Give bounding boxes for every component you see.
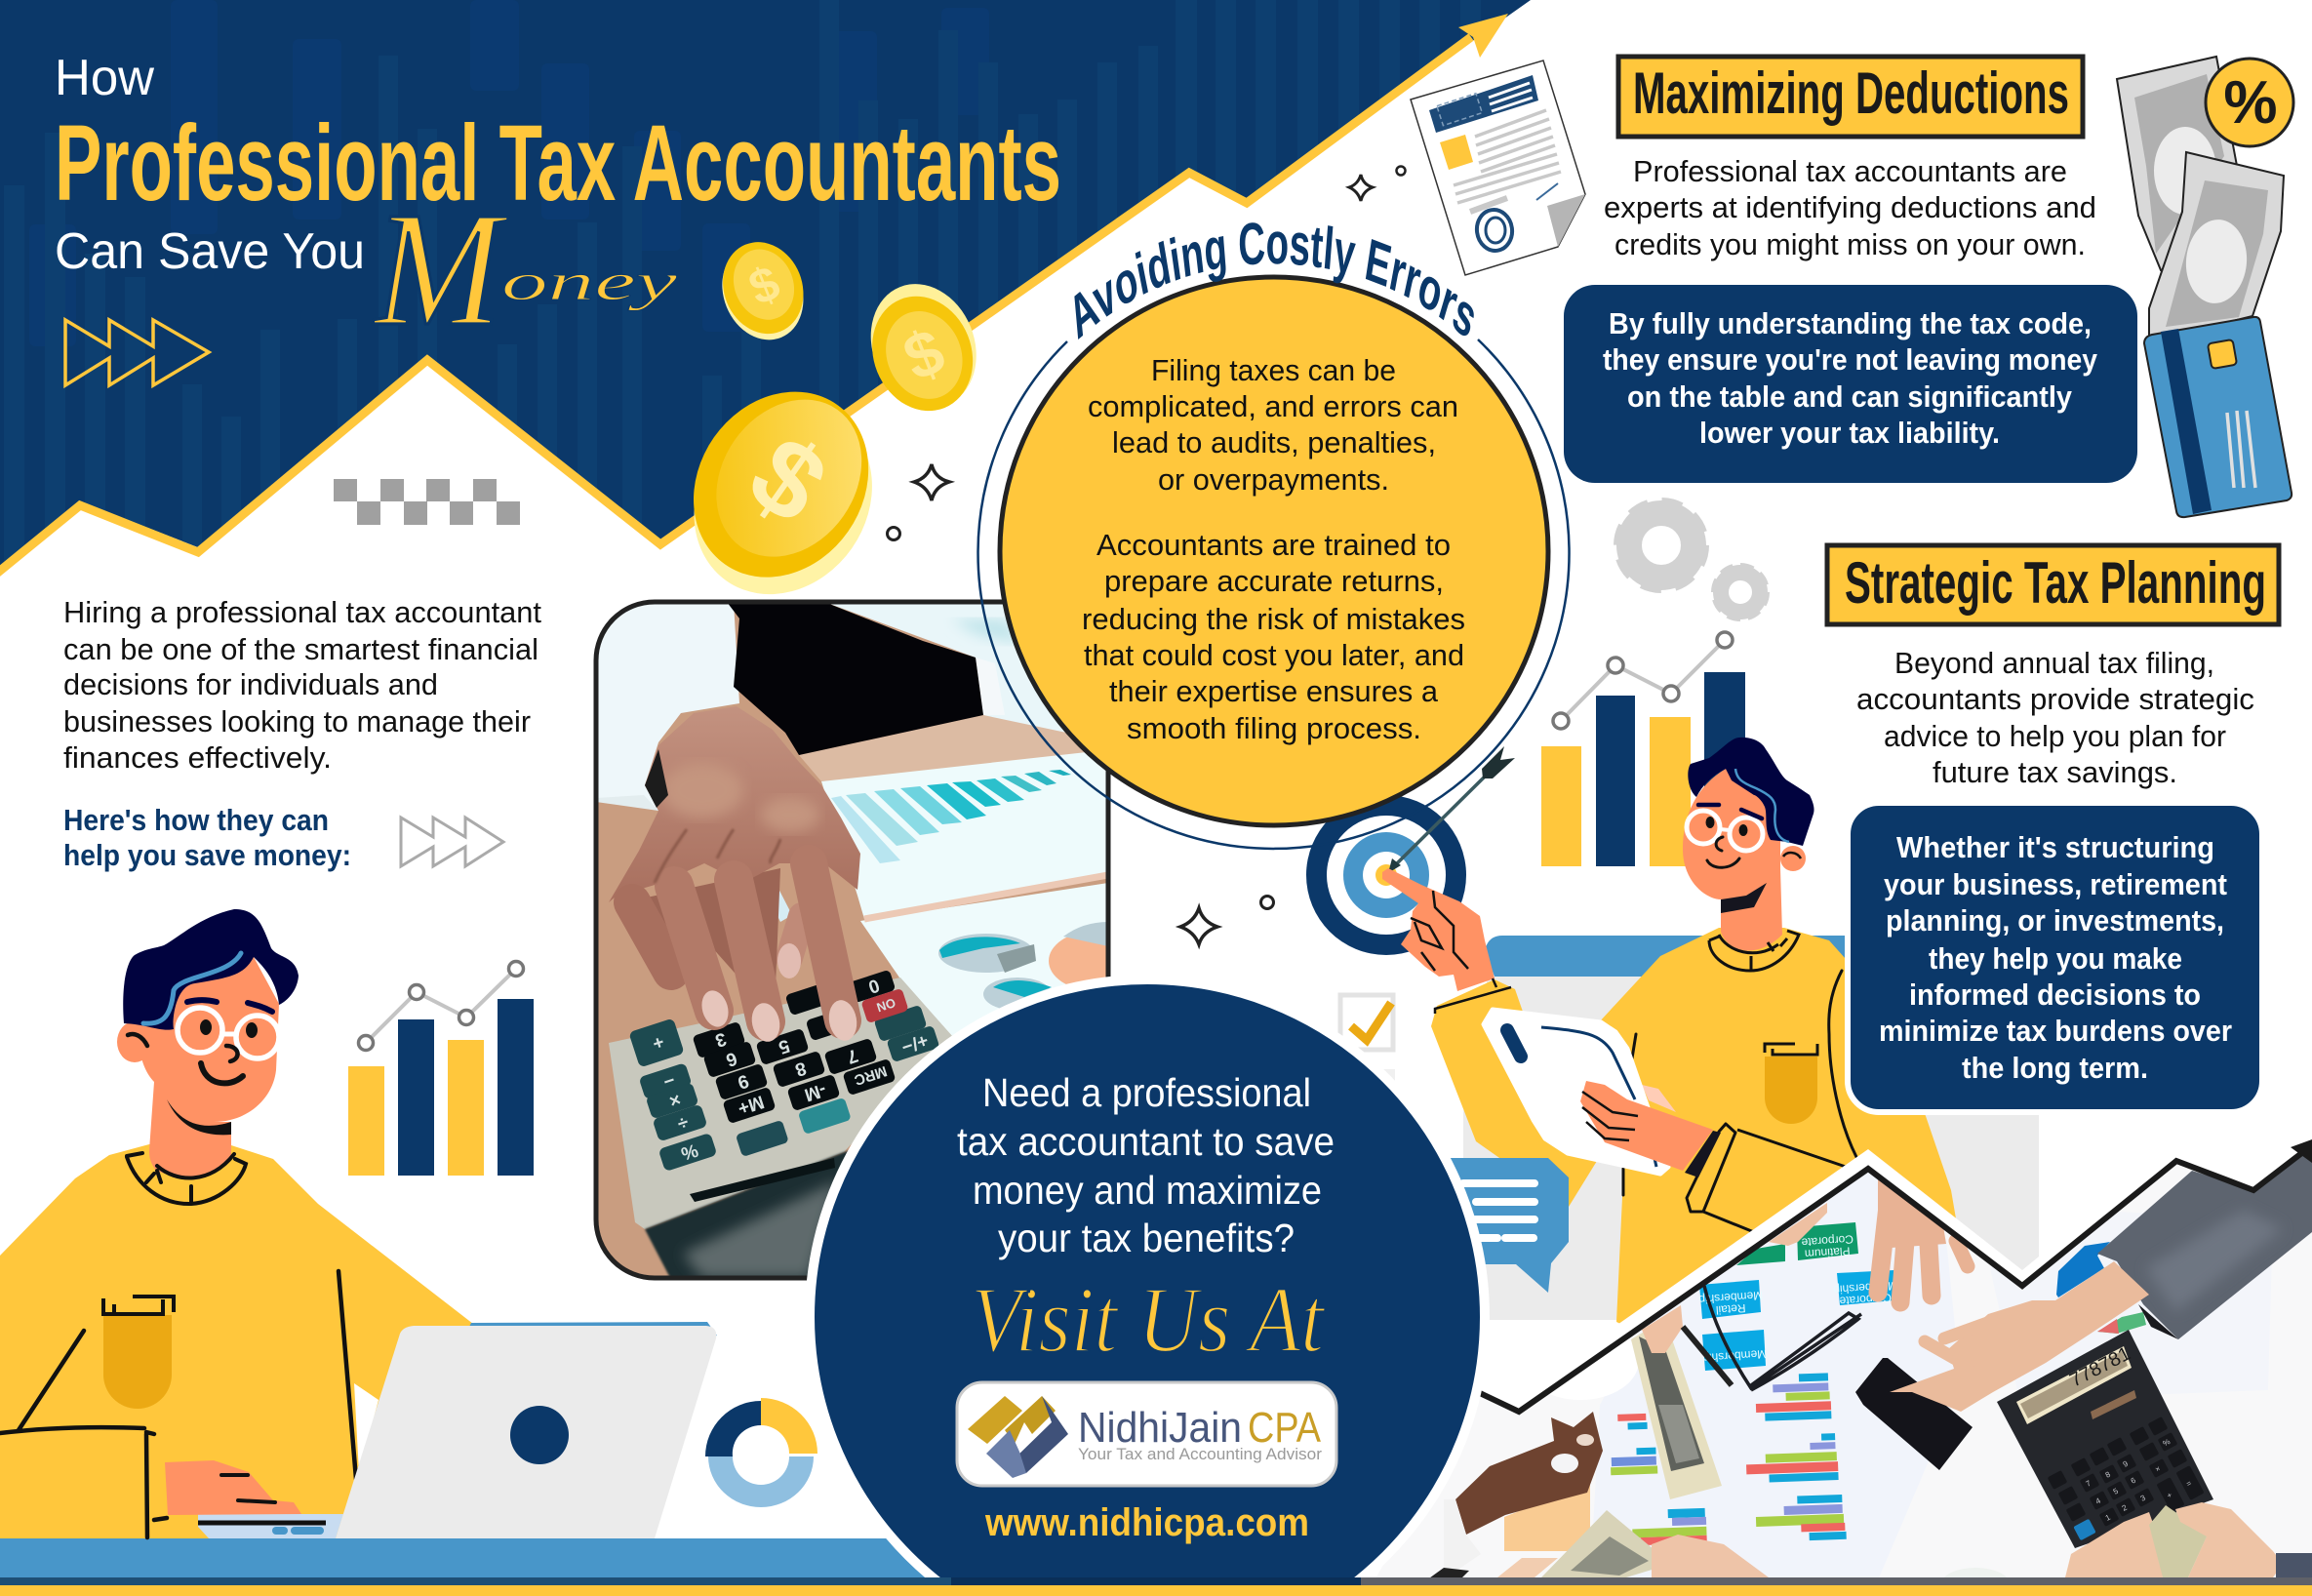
illustration: man at laptop xyxy=(0,909,717,1538)
title: Can Save You: Can Save You xyxy=(55,223,365,280)
text block: intro: Hiring a professional tax accountant xyxy=(63,595,541,629)
photo: team reviewing charts and money: Corporate xyxy=(1801,1232,1854,1250)
photo: team reviewing charts and money: 1 xyxy=(2104,1513,2112,1523)
panel: strategic callout: Whether it's structuring xyxy=(1896,830,2214,864)
paper sheets xyxy=(1590,1171,1961,1580)
panel: strategic callout: planning, or investments, xyxy=(1886,903,2224,938)
text block: deductions: credits you might miss on your own. xyxy=(1614,227,2086,261)
icon: triple chevron arrows xyxy=(65,320,209,385)
photo: hand on calculator: ON xyxy=(875,995,897,1015)
arm holding tablet xyxy=(1580,1081,1713,1171)
photo: hand on calculator: 5 xyxy=(776,1035,792,1057)
laptop xyxy=(468,1322,717,1338)
photo: hand on calculator: 7 xyxy=(844,1045,860,1067)
bar charts on paper xyxy=(1608,1373,1847,1547)
photo: team reviewing charts and money: 9 xyxy=(2122,1459,2130,1469)
panel: call to action circle xyxy=(810,979,1485,1596)
panel: strategic callout: the long term. xyxy=(1962,1051,2148,1085)
text block: deductions xyxy=(1604,154,2096,261)
text block: call to action: tax accountant to save xyxy=(957,1119,1335,1164)
icon: medium coin xyxy=(851,268,995,426)
text block: intro xyxy=(63,595,541,775)
icon: chat bubble xyxy=(1449,1158,1569,1293)
decoration: checker pattern xyxy=(334,479,520,525)
url: www.nidhicpa.com xyxy=(984,1501,1309,1544)
heading: Avoiding Costly Errors curved: Avoiding Costly Errors xyxy=(1074,222,1474,339)
photo: team reviewing charts and money: Membership xyxy=(1702,1347,1768,1365)
text block: how they help xyxy=(63,803,351,872)
panel: tax code callout: lower your tax liability. xyxy=(1699,416,2000,450)
panel: tax code callout: on the table and can significantly xyxy=(1627,379,2073,414)
text block: intro: businesses looking to manage their xyxy=(63,704,531,738)
text block: call to action xyxy=(957,1070,1335,1260)
panel: strategic callout xyxy=(1848,803,2262,1112)
icon: medium coin: $ xyxy=(894,314,954,394)
calculator xyxy=(1997,1330,2213,1548)
photo: team reviewing charts and money: 2 xyxy=(2121,1503,2129,1513)
sleeve xyxy=(2097,1144,2312,1339)
photo: team reviewing charts and money: 778781 xyxy=(2066,1343,2134,1391)
photo: hand on calculator: MRC xyxy=(852,1062,889,1089)
icon: large coin xyxy=(651,358,914,629)
title: Professional Tax Accountants: Professional Tax Accountants xyxy=(55,103,1061,223)
zigzag line with arrow end xyxy=(1480,1139,2312,1412)
panel: tax code callout xyxy=(1564,285,2137,483)
text block: costly errors: Filing taxes can be xyxy=(1151,353,1396,387)
panel: navy header background with chart bars xyxy=(0,0,1531,581)
logo: Nidhi Jain CPA: CPA xyxy=(1248,1404,1322,1452)
script: Visit Us At: Visit Us At xyxy=(971,1267,1326,1372)
text block: costly errors: complicated, and errors can xyxy=(1088,389,1458,423)
bottom strips xyxy=(0,1577,2312,1596)
heading: Maximizing Deductions xyxy=(1618,57,2083,137)
photo: hand on calculator: + xyxy=(650,1031,666,1054)
photo: team reviewing charts and money: × xyxy=(2154,1464,2162,1474)
chart: left bar chart xyxy=(348,962,534,1176)
photo: hand on calculator: 9 xyxy=(735,1070,751,1093)
growth line with arrowhead xyxy=(0,14,1508,576)
title: Money script: oney xyxy=(501,253,677,311)
panel: strategic callout: your business, retirement xyxy=(1884,867,2227,901)
icon: large gear xyxy=(1619,503,1703,587)
title: How: How xyxy=(55,50,154,106)
photo: hand on calculator: 3 xyxy=(712,1028,729,1051)
chart: right bar chart xyxy=(1541,632,1745,866)
org chart cards xyxy=(1797,1222,1858,1260)
photo: hand on calculator: 0 xyxy=(865,975,882,997)
text block: strategic: accountants provide strategic xyxy=(1856,682,2254,716)
sparkle under circle xyxy=(1180,908,1217,944)
text block: costly errors: smooth filing process. xyxy=(1127,711,1421,745)
photo: hand on calculator: 8 xyxy=(792,1057,809,1080)
icon: small coin xyxy=(707,230,819,352)
text block: strategic: future tax savings. xyxy=(1933,755,2177,789)
photo: hand on calculator: × xyxy=(666,1089,683,1111)
banknotes xyxy=(1631,1319,1722,1499)
text block: costly errors: reducing the risk of mistakes xyxy=(1082,602,1465,636)
photo: team reviewing charts and money: Membership xyxy=(1833,1279,1898,1297)
logo: Nidhi Jain CPA: NidhiJain xyxy=(1078,1404,1242,1452)
photo: hand on calculator: ÷ xyxy=(674,1111,691,1134)
panel: strategic callout: informed decisions to xyxy=(1909,978,2201,1012)
text block: intro: can be one of the smartest financial xyxy=(63,632,538,666)
neck and head xyxy=(1683,769,1782,950)
bottom right hands xyxy=(1944,1568,2007,1577)
photo: hand on calculator: +/− xyxy=(898,1029,931,1057)
text block: call to action: your tax benefits? xyxy=(998,1216,1295,1260)
chart: donut xyxy=(705,1398,817,1507)
icon: target with arrow xyxy=(1306,746,1515,955)
small dot under circle xyxy=(1260,896,1274,909)
text block: intro: finances effectively. xyxy=(63,740,332,775)
panel: tax code callout: By fully understanding the tax code, xyxy=(1609,306,2092,340)
text block: call to action: Need a professional xyxy=(982,1070,1311,1115)
photo: team reviewing charts and money: 6 xyxy=(2130,1476,2137,1486)
big yellow circle and arc xyxy=(978,277,1570,849)
title: Money script: M xyxy=(373,179,508,360)
text block: costly errors xyxy=(1082,353,1465,745)
text block: deductions: Professional tax accountants are xyxy=(1633,154,2067,188)
photo: team reviewing charts and money: 5 xyxy=(2112,1487,2120,1496)
neck and face xyxy=(140,957,279,1177)
photo: team reviewing charts and money: + xyxy=(2166,1491,2173,1500)
photo: hand on calculator: − xyxy=(660,1069,677,1092)
text block: how they help: help you save money: xyxy=(63,838,351,872)
open hand xyxy=(1890,1261,2149,1412)
table band xyxy=(0,1538,951,1585)
icon: checkbox xyxy=(1340,995,1395,1098)
photo: team reviewing charts and money: Membership xyxy=(1698,1289,1764,1306)
illustration: money and card: % xyxy=(2223,69,2278,137)
photo: team reviewing charts and money: 8 xyxy=(2104,1470,2112,1480)
panel: strategic callout: minimize tax burdens over xyxy=(1879,1014,2232,1048)
photo: team reviewing charts and money xyxy=(1430,1139,2312,1577)
photo: team reviewing charts and money: Platinum xyxy=(1804,1244,1851,1261)
text block: costly errors: their expertise ensures a xyxy=(1109,674,1439,708)
text block: costly errors: lead to audits, penalties, xyxy=(1112,425,1436,459)
text block: strategic: Beyond annual tax filing, xyxy=(1894,646,2214,680)
hand inside photo xyxy=(789,916,802,958)
photo: team reviewing charts and money: 3 xyxy=(2139,1494,2147,1503)
photo: team reviewing charts and money: % xyxy=(2162,1437,2172,1448)
small dot near document xyxy=(1397,166,1405,176)
photo: hand on calculator: M+ xyxy=(736,1091,767,1118)
text block: costly errors: Accountants are trained to xyxy=(1096,528,1451,562)
illustration: money and card xyxy=(2117,57,2293,517)
phone xyxy=(1855,1358,1973,1470)
sparkle near coins xyxy=(914,464,949,500)
photo: hand on calculator: -M xyxy=(802,1079,828,1105)
icon: large coin: $ xyxy=(729,412,848,546)
icon: small gear xyxy=(1715,567,1766,618)
photo: hand on calculator: % xyxy=(678,1139,700,1164)
small dot near coins xyxy=(888,527,899,540)
text block: intro: decisions for individuals and xyxy=(63,667,438,701)
text block: deductions: experts at identifying deductions and xyxy=(1604,190,2096,224)
photo: team reviewing charts and money: 4 xyxy=(2094,1496,2102,1506)
logo: Nidhi Jain CPA xyxy=(957,1382,1336,1486)
text block: call to action: money and maximize xyxy=(973,1168,1322,1213)
photo: team reviewing charts and money: = xyxy=(2185,1479,2193,1489)
illustration: man with tablet xyxy=(1431,738,2039,1366)
logo: Nidhi Jain CPA: Your Tax and Accounting Advisor xyxy=(1078,1445,1322,1463)
sparkle near document xyxy=(1349,175,1373,201)
icon: small coin: $ xyxy=(741,255,787,316)
top right hand fingers xyxy=(1878,1176,1968,1302)
photo: team reviewing charts and money: 7 xyxy=(2085,1479,2093,1489)
text block: costly errors: that could cost you later, and xyxy=(1084,638,1464,672)
photo: team reviewing charts and money: Corporate xyxy=(1839,1291,1892,1308)
panel: tax code callout: they ensure you're not leaving money xyxy=(1603,342,2098,377)
heading: Maximizing Deductions: Maximizing Deductions xyxy=(1633,60,2069,126)
panel: strategic callout: they help you make xyxy=(1929,941,2182,976)
photo: hand on calculator: 6 xyxy=(723,1048,739,1070)
text block: how they help: Here's how they can xyxy=(63,803,329,837)
blue and colored pie xyxy=(2056,1242,2110,1297)
icon: grey chevrons xyxy=(401,818,503,866)
dark hand xyxy=(1455,1412,1603,1535)
text block: costly errors: or overpayments. xyxy=(1158,462,1389,497)
text block: strategic: advice to help you plan for xyxy=(1884,719,2226,753)
text block: costly errors: prepare accurate returns, xyxy=(1104,564,1444,598)
text block: strategic xyxy=(1856,646,2254,789)
bottom money and hands xyxy=(1497,1558,1558,1577)
illustration: document xyxy=(1411,60,1585,275)
photo: team reviewing charts and money: Retail xyxy=(1715,1301,1746,1317)
pointing hand and cuff xyxy=(1382,868,1511,1014)
photo: hand on calculator xyxy=(596,602,1136,1278)
